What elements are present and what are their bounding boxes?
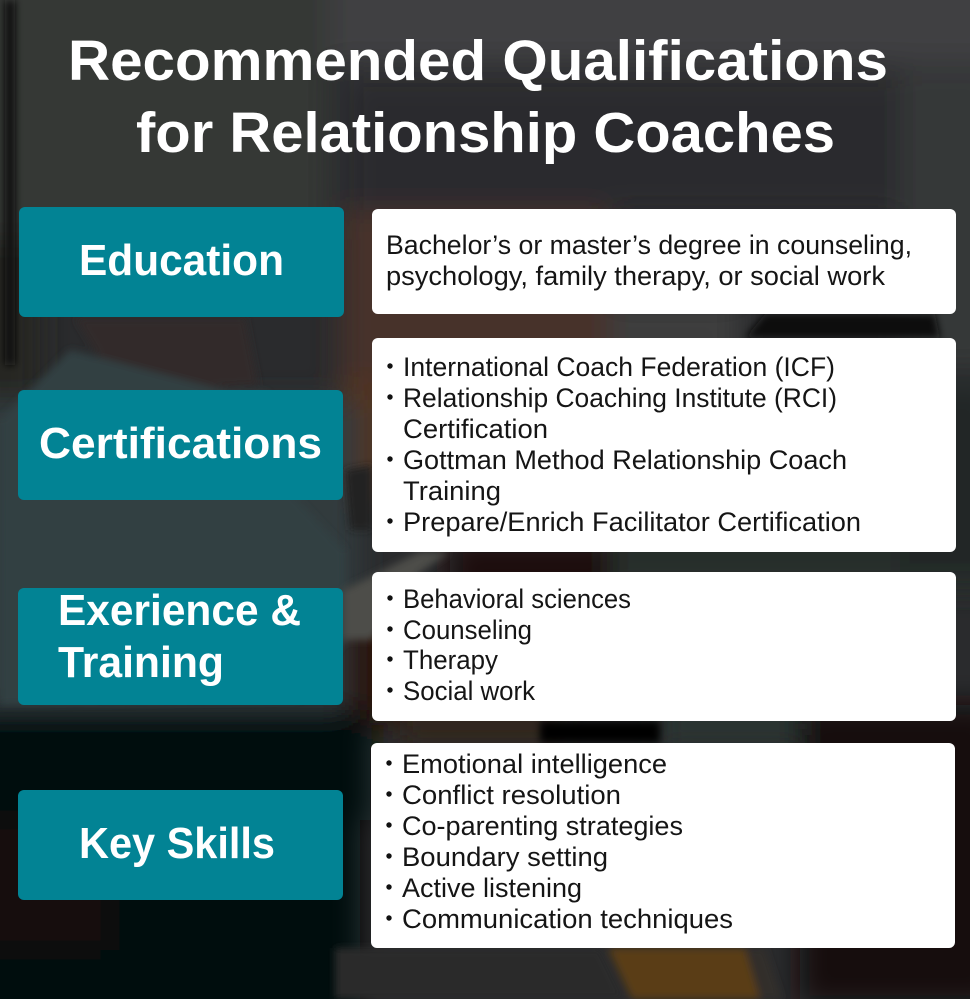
- panel: experience and training label: Training: [58, 638, 224, 687]
- panel: experience and training list: Behavioral sciences: [403, 584, 631, 614]
- panel: experience and training list: Counseling: [403, 615, 532, 645]
- panel: education details: [372, 209, 956, 314]
- panel: key skills list: Conflict resolution: [402, 780, 621, 810]
- panel: certifications list: Certification: [403, 414, 548, 444]
- panel: key skills label: Key Skills: [79, 819, 275, 868]
- panel: key skills list: Communication techniques: [402, 904, 733, 934]
- panel: experience and training list: Social work: [403, 676, 536, 706]
- panel: education details: psychology, family therapy, or social work: [386, 261, 886, 291]
- panel: key skills list: [371, 743, 955, 948]
- panel: certifications list: Training: [403, 476, 501, 506]
- panel: certifications list: [372, 338, 956, 552]
- panel: experience and training label: Exerience &: [58, 586, 301, 635]
- panel: certifications label: [18, 390, 343, 500]
- panel: certifications list: Gottman Method Relationship Coach: [403, 445, 847, 475]
- title: [68, 29, 888, 165]
- panel: experience and training list: [372, 572, 956, 721]
- panel: education label: Education: [79, 236, 284, 285]
- title: Recommended Qualifications: [68, 29, 888, 93]
- panel: key skills list: Boundary setting: [402, 842, 608, 872]
- panel: certifications list: Prepare/Enrich Facilitator Certification: [403, 507, 861, 537]
- panel: experience and training label: [18, 586, 343, 705]
- title: for Relationship Coaches: [136, 101, 835, 165]
- panel: key skills label: [18, 790, 343, 900]
- panel: certifications list: International Coach Federation (ICF): [403, 352, 835, 382]
- panel: certifications label: Certifications: [39, 419, 322, 468]
- panel: key skills list: Emotional intelligence: [402, 749, 667, 779]
- panel: key skills list: Co-parenting strategies: [402, 811, 683, 841]
- panel: education label: [19, 207, 344, 317]
- panel: certifications list: Relationship Coaching Institute (RCI): [403, 383, 837, 413]
- panel: experience and training list: Therapy: [403, 645, 499, 675]
- panel: key skills list: Active listening: [402, 873, 582, 903]
- panel: education details: Bachelor’s or master’s degree in counseling,: [386, 230, 912, 260]
